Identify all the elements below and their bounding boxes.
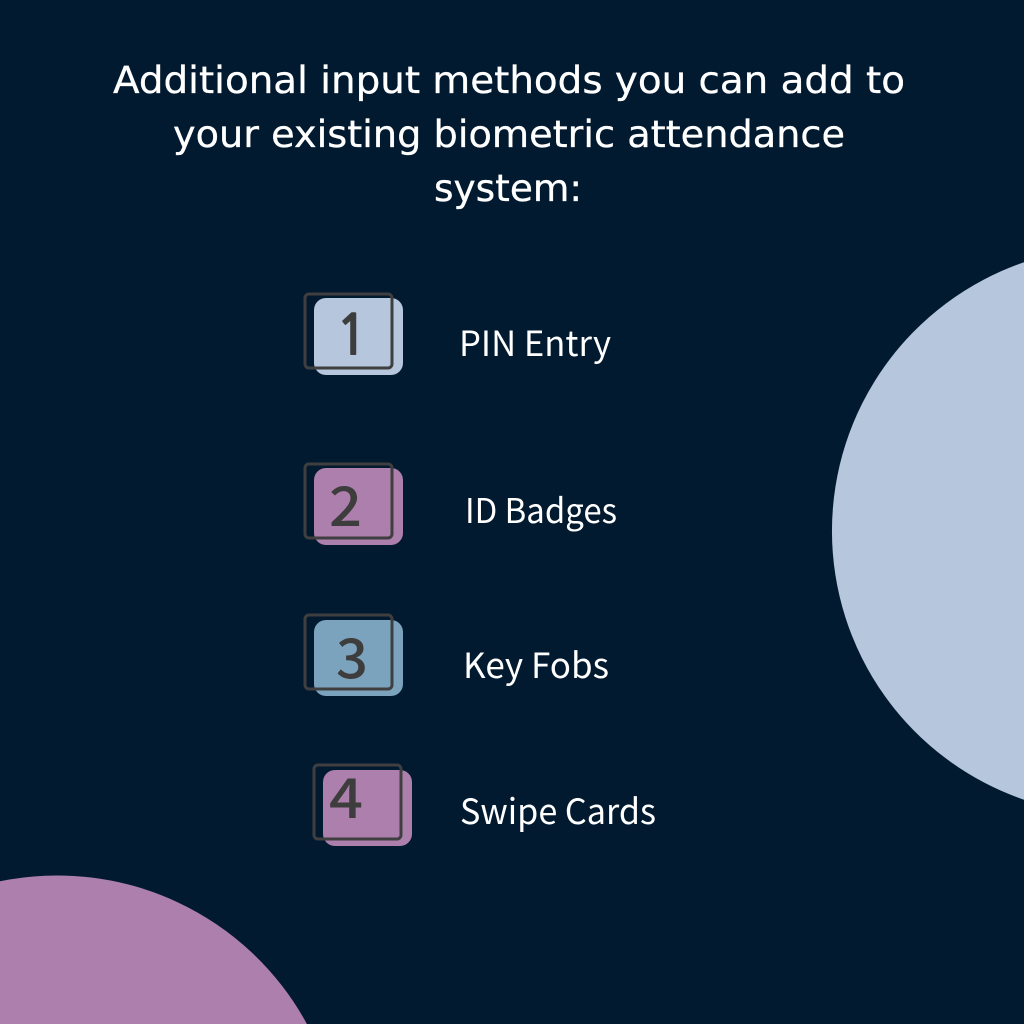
label: ID Badges: ID Badges [465,484,617,533]
number badge 3 [305,614,403,696]
number badge 1 [305,294,403,375]
number badge 4: 4 [329,754,363,834]
number badge 1: 1 [335,309,369,364]
label: Key Fobs: Key Fobs [463,638,609,689]
number badge 2 [305,462,403,545]
title: Additional input methods you can add to [113,59,905,102]
list item 4: Swipe Cards [314,754,656,846]
label: PIN Entry: PIN Entry [459,316,611,367]
list item 3: Key Fobs [305,614,609,696]
list item 1: PIN Entry [305,294,611,375]
label: Swipe Cards: Swipe Cards [460,784,656,835]
title [113,59,905,210]
number badge 3: 3 [336,614,368,694]
decorative circle: right [832,262,1024,800]
title: system: [434,167,582,210]
number badge 4 [314,754,412,846]
decorative circle: bottom left [0,875,307,1024]
list item 2: ID Badges [305,462,617,545]
number badge 2: 2 [329,462,362,542]
title: your existing biometric attendance [173,113,845,156]
